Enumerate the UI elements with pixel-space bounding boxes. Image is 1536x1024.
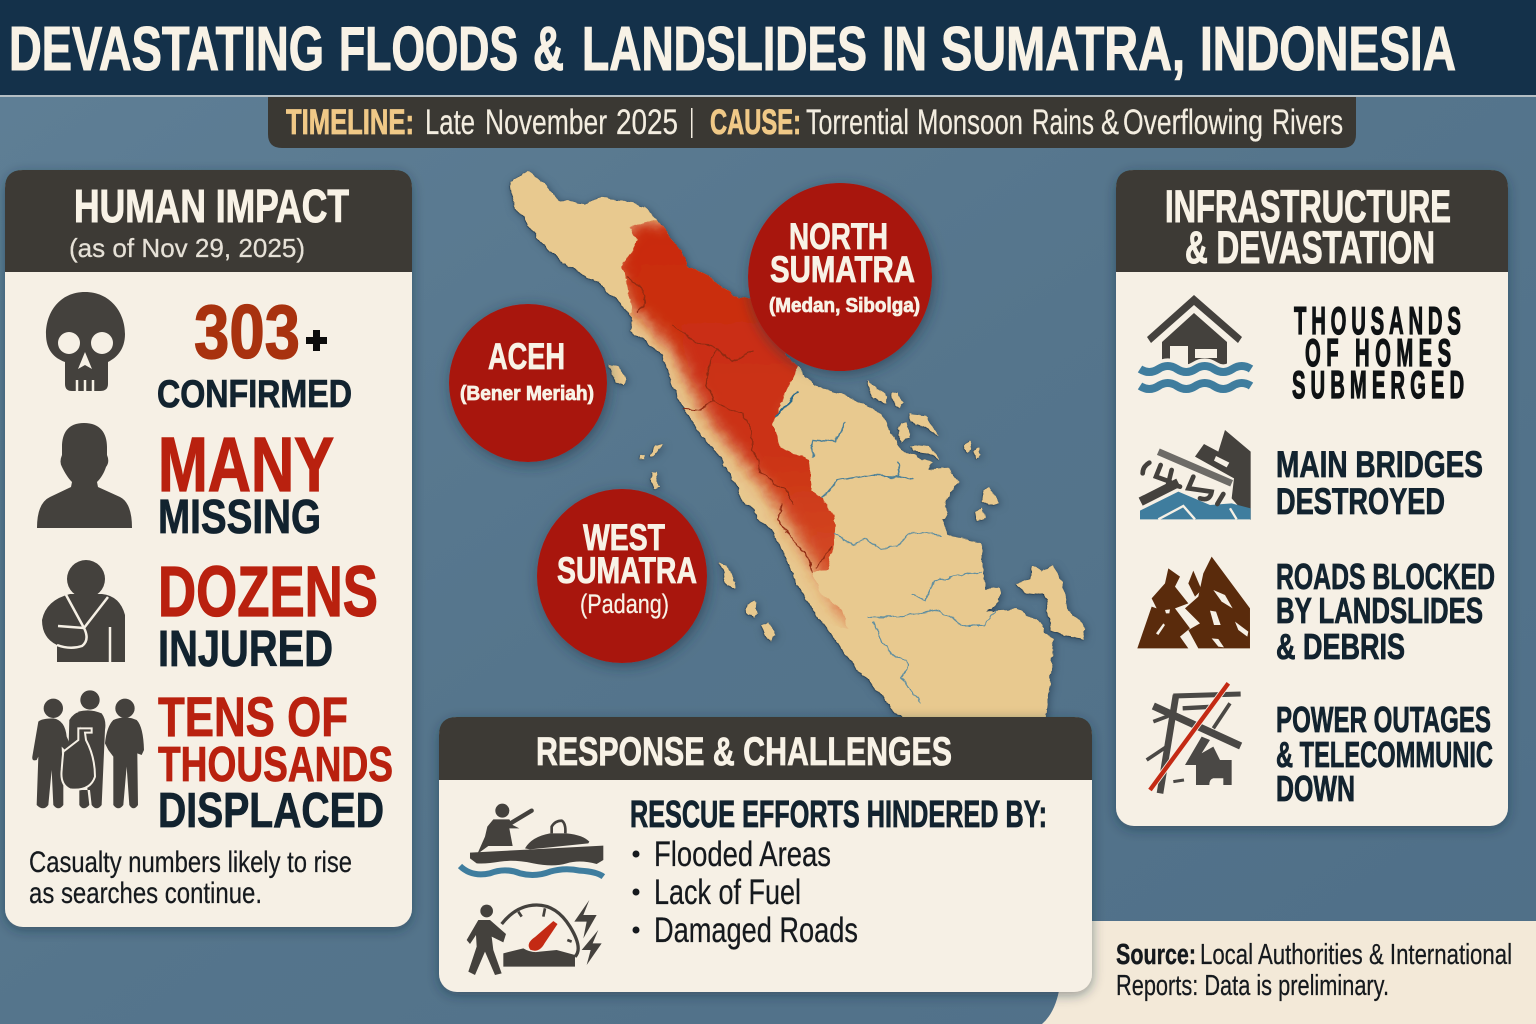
stat: displaced: THOUSANDS: [158, 738, 393, 792]
stat: displaced: [158, 685, 393, 838]
icon: injured person: [42, 560, 125, 662]
title: LANDSLIDES: [582, 15, 867, 84]
region marker: West Sumatra: SUMATRA: [557, 550, 697, 591]
text: homes submerged: SUBMERGED: [1292, 363, 1464, 407]
text: roads blocked: [1276, 556, 1495, 667]
cause label: CAUSE:: [710, 103, 801, 142]
region marker: North Sumatra: (Medan, Sibolga): [769, 295, 920, 317]
icon: displaced family: [32, 690, 144, 808]
icon: walker and fuel gauge: [467, 900, 602, 975]
stat: displaced: TENS OF: [158, 685, 348, 748]
cause value: &: [1101, 103, 1119, 142]
rescue hindered list: [630, 794, 1047, 950]
title: [9, 15, 1456, 84]
stat: missing: [158, 422, 334, 544]
panel: source: [1042, 921, 1536, 1024]
title: IN: [882, 15, 927, 84]
stat: deaths: [157, 290, 352, 416]
stat: missing: MISSING: [158, 491, 321, 544]
flood-affected zone: [621, 220, 848, 629]
cause value: Overflowing: [1123, 103, 1263, 142]
text: homes submerged: OF HOMES: [1305, 331, 1451, 375]
icon: destroyed bridge: [1140, 430, 1251, 520]
rescue hindered list: RESCUE EFFORTS HINDERED BY:: [630, 794, 1047, 836]
timeline and cause bar: [268, 97, 1356, 148]
icon: rescue boat: [460, 804, 603, 877]
text: homes submerged: [1292, 299, 1464, 407]
stat: missing: MANY: [158, 422, 334, 508]
panel: infrastructure and devastation: [1116, 170, 1508, 826]
text: power outages: [1276, 699, 1493, 809]
region marker: North Sumatra: [748, 183, 932, 371]
text: power outages: DOWN: [1276, 768, 1355, 809]
region marker: Aceh: ACEH: [488, 336, 565, 377]
stat: deaths: CONFIRMED: [157, 373, 352, 416]
cause value: Rivers: [1272, 103, 1343, 142]
region marker: West Sumatra: WEST: [583, 517, 665, 558]
region marker: North Sumatra: NORTH: [789, 216, 888, 257]
stat: injured: [158, 553, 378, 677]
icon: skull: [46, 292, 125, 391]
region marker: Aceh: (Bener Meriah): [460, 383, 594, 405]
title: INDONESIA: [1200, 15, 1456, 84]
icon: flooded house: [1140, 295, 1251, 389]
timeline label: TIMELINE:: [286, 103, 414, 142]
title: DEVASTATING: [9, 15, 324, 84]
heading: human impact: HUMAN IMPACT: [74, 180, 349, 232]
map of Sumatra: [509, 171, 1086, 731]
title: SUMATRA,: [941, 15, 1185, 84]
panel: response and challenges: [439, 717, 1092, 992]
stat: deaths: 303: [194, 290, 300, 375]
region marker: West Sumatra: [537, 489, 707, 663]
stat: injured: DOZENS: [158, 553, 378, 632]
stat: injured: INJURED: [158, 620, 333, 677]
cause value: Monsoon: [917, 103, 1023, 142]
icon: landslide: [1137, 557, 1250, 648]
note: casualty numbers: Casualty numbers likely to rise: [29, 846, 352, 879]
heading: response: RESPONSE & CHALLENGES: [536, 730, 952, 774]
rescue hindered list: Flooded Areas: [654, 835, 831, 874]
panel: human impact: [5, 170, 412, 927]
source text: Source:: [1116, 939, 1196, 971]
text: bridges destroyed: [1276, 444, 1483, 522]
region marker: Aceh: [449, 304, 607, 462]
timeline value: Late: [425, 103, 475, 142]
note: casualty numbers: [29, 846, 352, 910]
timeline value: [425, 103, 692, 142]
heading: infrastructure: [1165, 181, 1451, 273]
text: bridges destroyed: DESTROYED: [1276, 481, 1445, 522]
rescue hindered list: Damaged Roads: [654, 911, 858, 950]
subheading: date: (as of Nov 29, 2025): [69, 233, 305, 263]
cause value: Rains: [1032, 103, 1094, 142]
source text: [1116, 939, 1512, 1002]
heading: infrastructure: & DEVASTATION: [1185, 222, 1435, 273]
title: FLOODS: [339, 15, 518, 84]
rivers: [627, 276, 995, 702]
region marker: North Sumatra: SUMATRA: [770, 249, 915, 290]
header band: [0, 0, 1536, 97]
stat: displaced: DISPLACED: [158, 784, 384, 838]
timeline value: November: [485, 103, 607, 142]
source text: Reports: Data is preliminary.: [1116, 970, 1389, 1002]
region marker: West Sumatra: (Padang): [580, 589, 669, 619]
text: roads blocked: & DEBRIS: [1276, 626, 1405, 667]
cause value: [806, 103, 1343, 142]
note: casualty numbers: as searches continue.: [29, 877, 262, 910]
icon: power outage: [1147, 683, 1241, 793]
rescue hindered list: Lack of Fuel: [654, 873, 801, 912]
timeline value: 2025: [616, 103, 678, 142]
cause value: Torrential: [806, 103, 909, 142]
text: homes submerged: THOUSANDS: [1294, 299, 1461, 343]
title: &: [533, 15, 564, 84]
icon: missing person: [37, 423, 132, 528]
